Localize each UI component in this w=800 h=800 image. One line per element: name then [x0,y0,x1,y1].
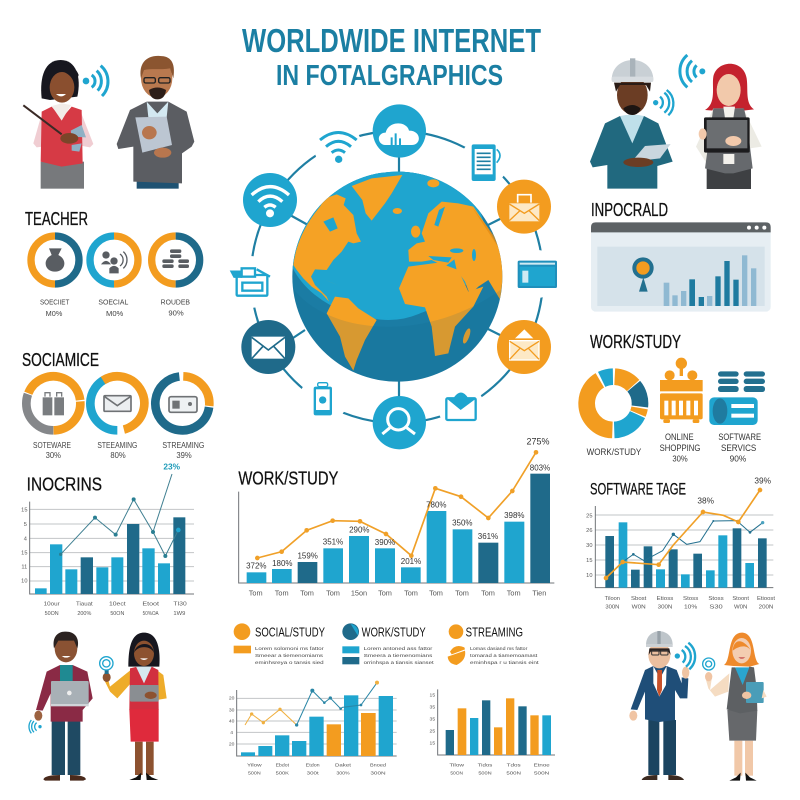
bar chart: right [430,689,555,777]
axis labels: 10our [44,602,60,608]
bar chart: left: 40 [229,719,235,725]
axis labels: 15 [21,508,27,514]
axis labels: 10% [684,604,697,610]
axis labels [586,513,775,610]
donut labels: 80% [110,451,126,460]
value labels: 159% [297,551,318,560]
axis labels: 50ON [45,611,59,617]
axis labels: Stoont [732,596,749,602]
axis labels: 26 [586,528,592,534]
value labels: 180% [272,559,293,568]
heading: software tage: SOFTWARE TAGE [590,479,686,498]
icon: software services [709,371,765,425]
axis labels: 10 [21,579,27,585]
bar chart: right: 15 [430,693,435,699]
donut: soeciet [31,236,200,284]
axis labels: S30 [709,604,723,610]
bar chart: right: 35 [430,705,435,711]
axis labels: Stoss [708,596,724,602]
value labels: 351% [323,538,343,547]
illustration: teacher and colleague [23,56,194,189]
orbit ring [251,131,543,423]
panel: software tage chart [586,475,775,610]
value labels: 290% [349,525,370,534]
axis labels [249,589,546,598]
value labels: 201% [401,557,421,566]
donut labels: STREAMING [162,441,204,450]
icon: money bag [46,248,64,272]
legend: work/study: Lorem antoned ass fattor [364,646,433,652]
axis labels: Tom [455,589,469,598]
axis labels: Tiauat [76,602,93,608]
icon: orange mail [497,320,551,374]
legend: work/study [342,623,434,666]
donut labels: STEEAMING [97,441,137,450]
bar chart: left: 300t [307,771,319,777]
teal trend line [623,520,764,562]
panel: inocrins chart [21,462,194,617]
value labels: 39% [754,475,772,485]
bar chart: right: Tidos [478,763,493,769]
donut labels: M0% [106,309,124,318]
axis labels: 4 [24,536,27,542]
bar chart: left: Ebdot [276,763,290,769]
axis labels: Tiloon [605,596,620,602]
bars [247,511,524,583]
axis labels: Stoss [683,596,699,602]
donut: software [18,366,213,441]
donut labels: 39% [176,451,192,460]
bar chart: left: Yilow [247,763,262,769]
axis labels: Sbost [631,596,647,602]
bar chart: left [229,681,397,777]
bar chart: left: Bnoed [370,763,386,769]
axis labels: 300N [658,604,672,610]
bar chart: right: 35 [430,717,435,723]
labels [587,432,761,463]
axis labels: Tom [275,589,289,598]
icon: phone [314,383,332,415]
legend: streaming: eminhspa r u tiansis eint [470,660,539,666]
axis labels [21,508,187,617]
axis labels: Tom [378,589,392,598]
donut labels [40,298,190,318]
heading: teacher: TEACHER [25,208,88,229]
axis labels: 30 [586,543,592,549]
legend: social/study [234,623,325,666]
donut labels: SOECIIET [40,298,70,307]
icon: cloud [373,104,426,158]
bar chart: left: 500N [248,771,261,777]
axis labels: Etioost [757,596,775,602]
heading: sociamice: SOCIAMICE [22,349,99,370]
bar chart: right: Tdos [507,763,521,769]
axis labels: 50%OA [143,611,159,617]
legend: streaming: Lomas dasiand ms fattor [470,646,528,652]
bar chart: left: 300% [336,771,350,777]
bar chart: left: 500K [276,771,290,777]
labels: SERVICS [721,443,756,453]
axis labels: Tom [429,589,443,598]
icon: mail dark [241,320,295,374]
axis labels: Tom [326,589,340,598]
axis labels: 10ect [109,602,126,608]
axis labels: 1W9 [173,611,185,617]
axis labels: Tom [404,589,418,598]
donut row: sociamice [18,366,213,460]
legend: streaming [448,624,539,666]
icon: media card [169,397,197,412]
legend: social/study: eminhsreya o tansis sied [255,660,324,666]
axis labels: 200N [759,604,773,610]
labels: 30% [672,454,688,463]
axis labels: 15on [351,589,367,598]
icon: people signal [101,251,127,273]
panel: work/study chart [238,437,554,598]
legend: social/study: SOCIAL/STUDY [255,625,325,639]
donut labels: M0% [46,309,63,318]
bar chart: right: 500N [478,771,492,777]
value labels: 38% [697,496,715,506]
illustration: engineer in suit and businesswoman [629,631,767,781]
heading: inpocrald: INPOCRALD [591,199,668,220]
icon: wifi circle [243,173,297,227]
legend: work/study: Smeera a tiemenomians [364,653,433,659]
icon: gift bags [43,393,64,415]
bars [605,528,767,588]
legend: streaming: STREAMING [466,625,523,639]
labels: SHOPPING [660,443,700,453]
bar chart: left: 20 [229,742,235,748]
globe and orbit icons [224,104,561,449]
bar chart: right: Etnoe [534,763,550,769]
panel: work/study donut and icons [576,358,765,463]
heading: work/study: WORK/STUDY [238,467,339,488]
connector nodes [232,104,557,449]
donut labels: SOTEWARE [33,441,71,450]
axis labels: Tien [532,589,546,598]
bar chart: left: 4 [230,730,233,736]
icon: orange mail top [497,180,551,234]
donut labels: 90% [168,308,184,317]
value labels [697,475,772,506]
illustration: couple with laptop and tablet [29,632,167,781]
labels: SOFTWARE [718,432,761,442]
value labels: 361% [478,532,498,541]
value labels: 398% [504,511,525,520]
bar chart: left: 300N [370,771,386,777]
heading: inocrins: INOCRINS [27,474,102,495]
legend: social/study: Smeear a tiemenomiams [255,653,324,659]
icon: card [518,261,557,288]
axis labels: Tom [507,589,521,598]
bar chart: left: Daket [335,763,352,769]
legend: streaming: tomarad a tiamemoamast [470,653,538,659]
axis labels: 15 [586,558,592,564]
panel: legend and bottom charts [229,623,555,777]
legend: work/study: WORK/STUDY [362,625,426,639]
panel: browser dashboard [591,222,771,312]
axis labels: 10 [586,573,592,579]
bar chart: left: Etdon [306,763,320,769]
donut chart [576,366,651,441]
bars [35,544,170,594]
axis labels: Tom [300,589,314,598]
value labels: 275% [527,437,549,447]
callout: 23% [163,462,181,472]
icon: database stacks [162,249,189,268]
axis labels: Tom [249,589,263,598]
axis labels: 200% [77,611,91,617]
donut labels: ROUDEB [161,298,190,307]
title: IN FOTALGRAPHICS [276,60,503,92]
icon: wifi [320,132,357,163]
value labels: 803% [530,463,550,472]
trend line [59,474,181,558]
icon: envelope [104,396,131,411]
legend: work/study: orrinhspa a tiansis sianset [364,660,434,666]
icon: mail bag [446,392,476,420]
donut labels: 30% [46,451,61,460]
illustration: engineer and woman with tablet [590,55,762,189]
value labels: 780% [426,501,447,510]
bar chart: right: 500N [534,771,550,777]
labels: WORK/STUDY [587,447,641,457]
orange trend line [604,488,762,580]
bar chart: right: 15 [430,740,435,746]
axis labels: 15 [21,551,27,557]
bar chart: right: 25 [430,729,435,735]
icon: shopping [660,358,703,423]
legend: social/study: Lorem solomoni ms fattor [255,646,324,652]
bar chart: right: 500N [506,771,521,777]
trend line [255,450,538,560]
axis labels: Tom [481,589,495,598]
donut row: teacher [31,236,200,318]
title [242,22,541,92]
axis labels: 300N [605,604,619,610]
axis labels: 5 [24,522,27,528]
icon: printer [232,268,270,296]
axis labels: Etioss [657,596,674,602]
value labels: 372% [246,561,267,570]
axis labels: Etoot [142,602,160,608]
axis labels: 25 [586,513,592,519]
donut labels: SOECIAL [98,298,128,307]
icon: gear badge [632,257,654,292]
icon: search [373,396,426,449]
bar chart: right: Tilow [449,763,465,769]
labels: ONLINE [665,432,694,442]
title: WORLDWIDE INTERNET [242,22,541,59]
bar chart: left: 20 [229,696,235,702]
axis labels: W0N [734,604,747,610]
donut labels [33,441,204,460]
axis labels: TI30 [173,602,187,608]
axis labels: 11 [21,565,27,571]
axis labels: W0N [632,604,646,610]
heading: work/study right: WORK/STUDY [590,331,681,352]
value labels: 390% [375,538,395,547]
bar chart: right: 50ON [450,771,463,777]
axis labels: 50ON [110,611,124,617]
icon: tablet [472,144,500,181]
globe [292,172,502,382]
labels: 90% [730,454,746,463]
bar chart: left: 30 [229,708,235,714]
mini bars [664,255,756,306]
value labels [246,437,550,570]
value labels: 350% [452,519,473,528]
